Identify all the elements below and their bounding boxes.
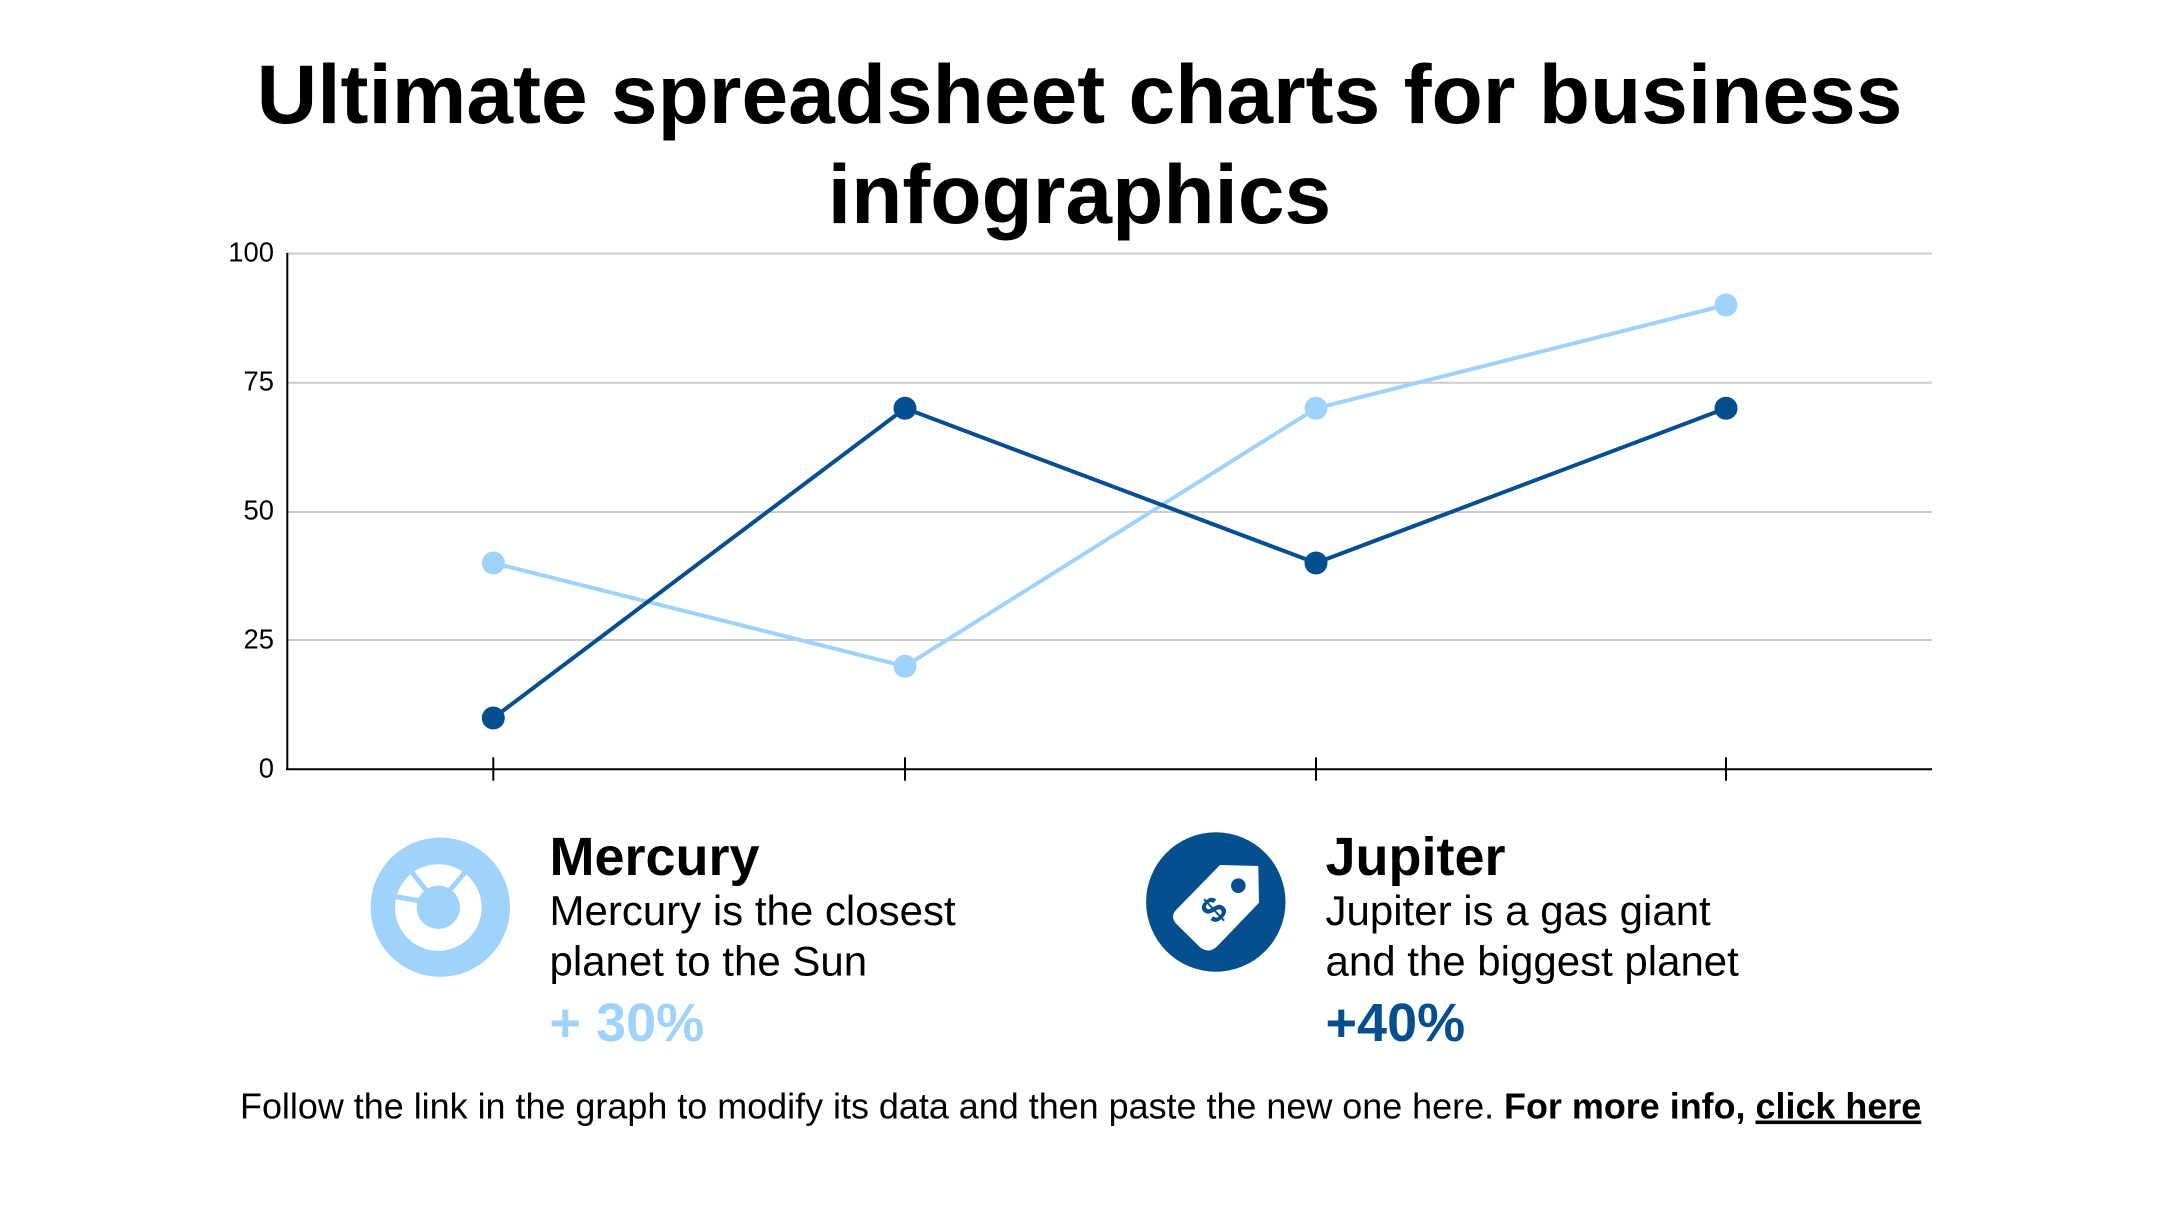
title: [257, 47, 1902, 241]
panel: Mercury: [550, 827, 956, 1053]
axis labels: 0: [259, 752, 274, 783]
title: Ultimate spreadsheet charts for business: [257, 47, 1902, 141]
icon: gauge: [371, 838, 510, 977]
icon: price tag: [1146, 832, 1286, 972]
panel: Jupiter: [1326, 827, 1739, 1053]
panel: Mercury: Mercury: [550, 827, 760, 887]
axis labels: 75: [244, 366, 274, 397]
title: infographics: [828, 147, 1331, 241]
series: Mercury: [482, 294, 1737, 678]
series: Jupiter: [482, 397, 1737, 730]
axis labels: 25: [244, 623, 274, 654]
panel: Jupiter: Jupiter: [1326, 827, 1506, 887]
panel: Jupiter: +40%: [1326, 993, 1465, 1053]
panel: Mercury: + 30%: [550, 993, 704, 1053]
line chart: [228, 237, 1932, 783]
panel: Mercury: planet to the Sun: [550, 938, 867, 984]
axis labels: [228, 237, 274, 783]
axis labels: 50: [244, 494, 274, 526]
icon: price tag: $: [1192, 888, 1235, 931]
panel: Jupiter: Jupiter is a gas giant: [1326, 887, 1711, 934]
panel: Jupiter: and the biggest planet: [1326, 938, 1739, 984]
axis labels: 100: [228, 237, 274, 268]
panel: Mercury: Mercury is the closest: [550, 887, 956, 934]
footer note: Follow the link in the graph to modify its data and then paste the new one here. For more info, click here: [240, 1086, 1921, 1126]
